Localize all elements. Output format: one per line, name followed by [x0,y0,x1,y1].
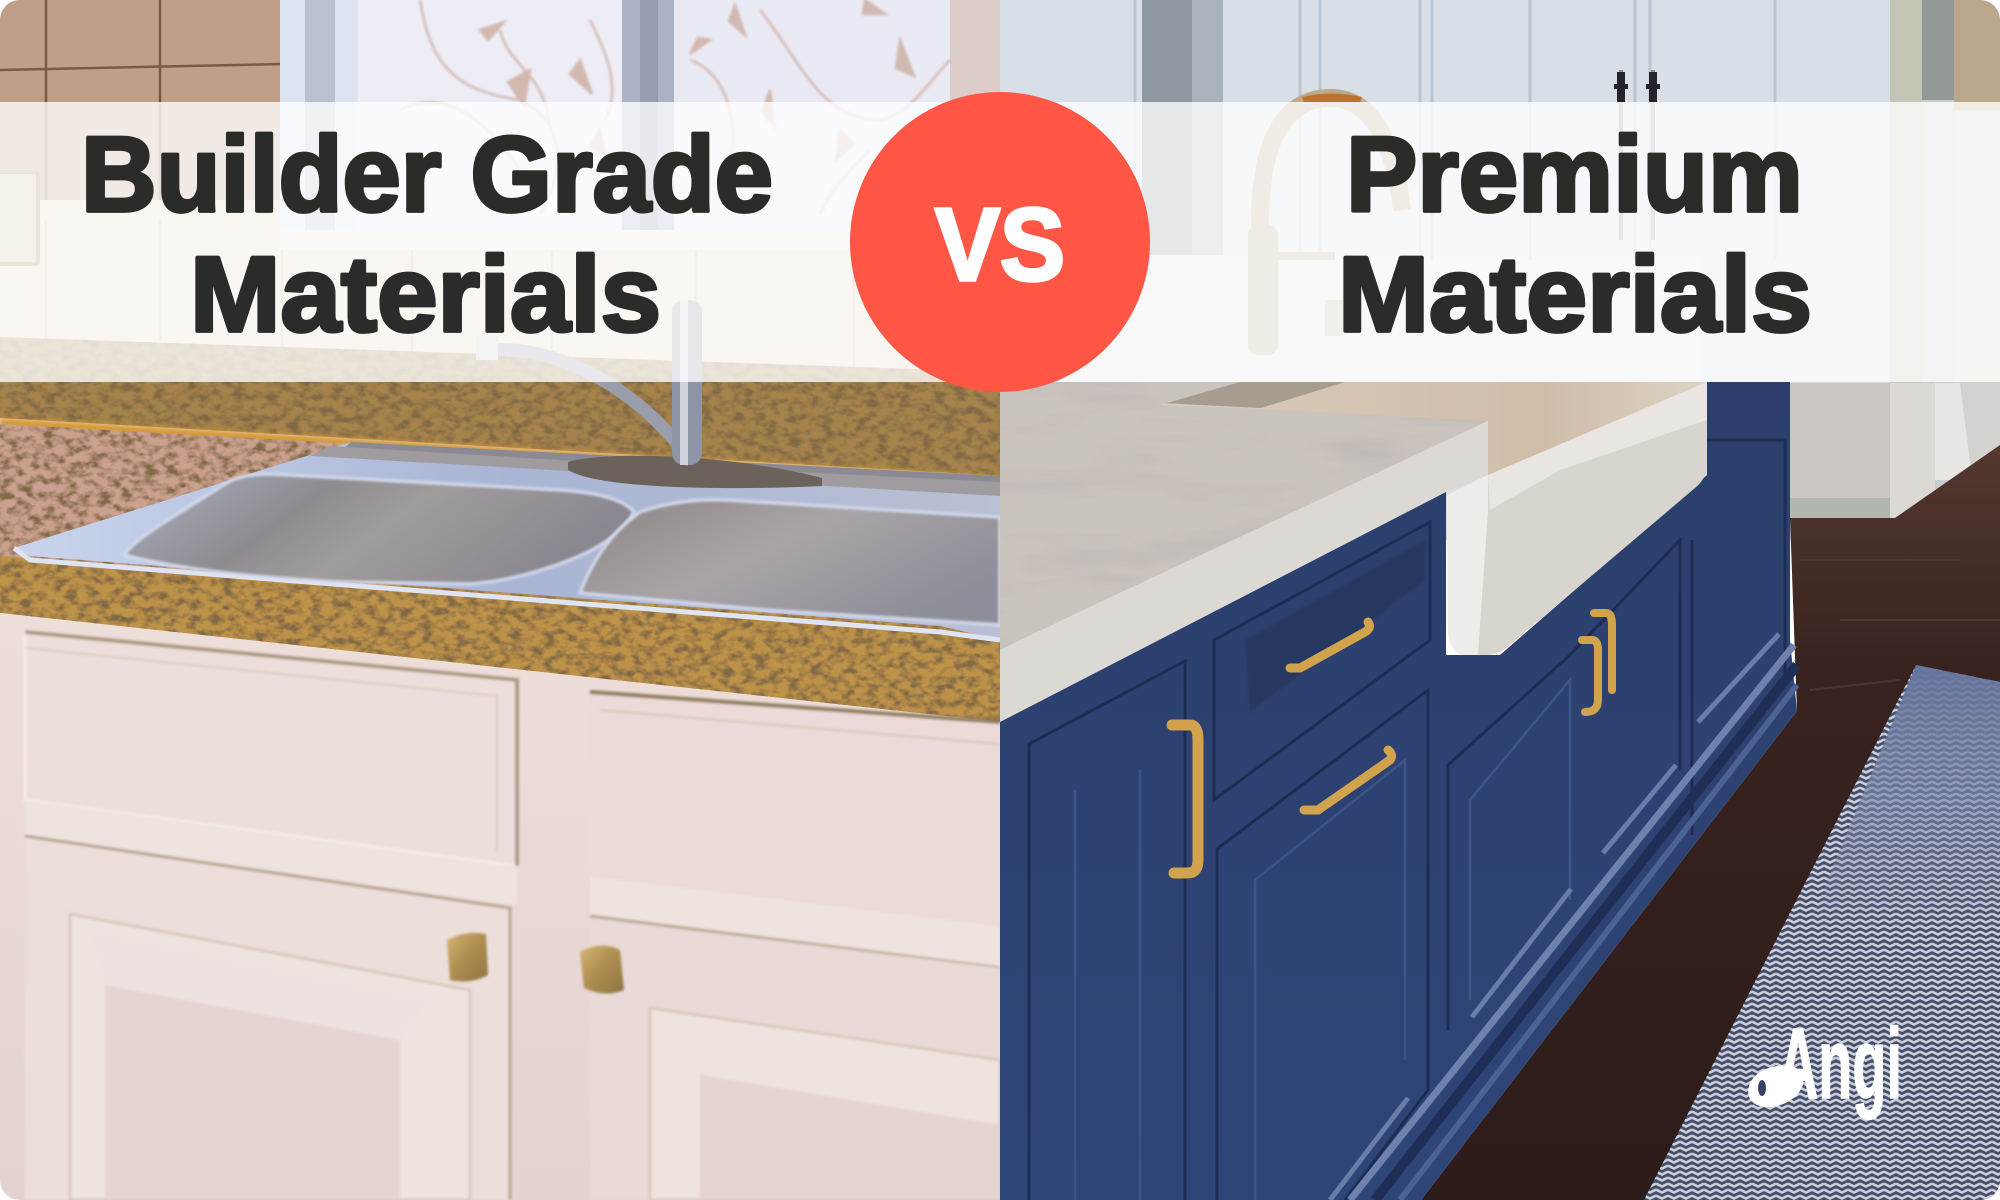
sink interior [1160,382,1707,475]
granite countertop [0,424,516,594]
right bowl [580,500,1000,625]
stainless steel sink [14,442,1000,640]
outlet cover [0,172,38,264]
cabinet pulls [1621,70,1653,240]
hardwood floor [1421,445,2000,1200]
photo: builder grade kitchen [0,0,1000,1200]
panel bevel highlights [1330,634,1779,1200]
farmhouse sink front [1447,382,1707,655]
countertop front edge [0,556,1000,722]
white cabinet base [0,613,1000,1200]
plinth highlight [1350,645,1794,1200]
Angi logo [1748,1008,1902,1120]
herringbone rug [1644,665,2000,1200]
heading: builder grade materials: Builder Grade [81,114,773,234]
drawer fronts and doors [25,632,1000,1200]
blue island cabinets [1000,382,1797,1200]
granite backsplash [0,337,1000,476]
heading: premium materials [1338,114,1812,354]
door panels [1029,440,1785,1200]
Angi logo: Angi [1778,1008,1902,1120]
left bowl [124,474,634,584]
brass faucet [1248,94,1402,355]
vs badge [850,92,1150,392]
photo: premium kitchen [1000,0,2000,1200]
heading: builder grade materials: Materials [190,234,661,354]
vs badge: VS [935,187,1065,302]
brass cabinet knobs [447,933,624,994]
translucent title band [0,102,2000,382]
wall tiles and window [0,0,1000,480]
marble countertop [1000,382,1488,650]
gold handles [1172,613,1612,873]
heading: builder grade materials [81,114,773,354]
back cabinets and hallway [1000,0,2000,540]
faucet [476,300,822,488]
heading: premium materials: Materials [1338,234,1812,354]
countertop edge [1000,421,1488,722]
heading: premium materials: Premium [1346,114,1803,234]
